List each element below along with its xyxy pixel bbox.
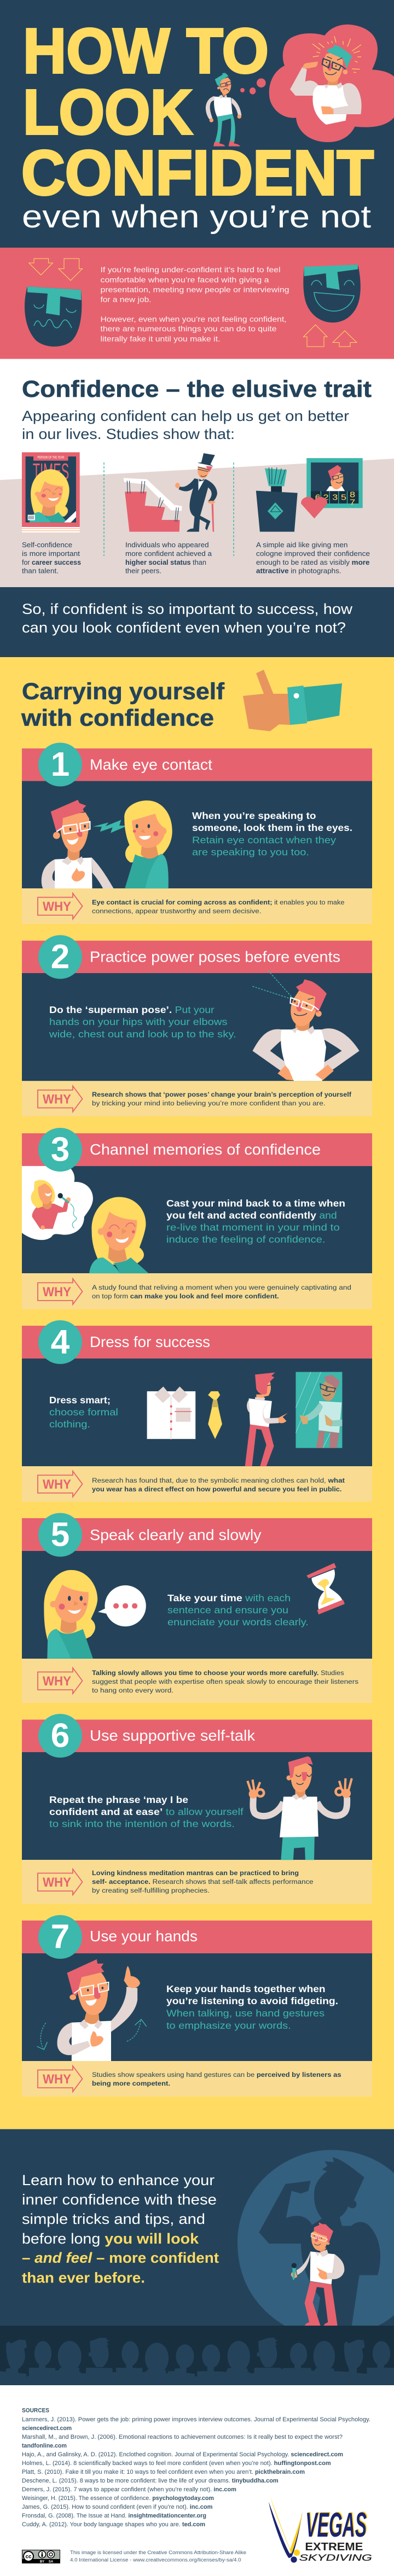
- step text: are speaking to you too.: [192, 846, 309, 857]
- why text: connections, appear trustworthy and seem decisive.: [92, 908, 262, 915]
- step text: [192, 810, 352, 857]
- panel: conclusion stage: [0, 2129, 394, 2326]
- why text: Talking slowly allows you time to choose your words more carefully. Studies: [92, 1669, 344, 1677]
- why arrow: WHY: [43, 1674, 71, 1689]
- icon: cologne, photo and heart: 7: [350, 497, 355, 507]
- step title: Dress for success: [90, 1333, 210, 1350]
- caption: career success: is more important: [22, 550, 80, 558]
- step title: Speak clearly and slowly: [90, 1526, 262, 1543]
- why text: [92, 1284, 351, 1300]
- sources: Weisinger, H. (2015). The essence of confidence. psychologytoday.com: [22, 2495, 214, 2502]
- caption: cologne: [256, 541, 370, 575]
- step text: hands on your hips with your elbows: [49, 1016, 228, 1027]
- step title: Practice power poses before events: [90, 948, 340, 965]
- why text: [92, 1477, 345, 1493]
- why arrow: WHY: [43, 1875, 71, 1890]
- heading: Confidence – the elusive trait: [22, 376, 372, 402]
- dividers: [104, 462, 234, 556]
- why arrow: WHY: [43, 1285, 71, 1299]
- intro text: there are numerous things you can do to quite: [101, 324, 277, 333]
- illustration: shirt, tie, man and mirror: [147, 1372, 342, 1466]
- intro text: If you’re feeling under-confident it’s hard to feel: [101, 265, 280, 274]
- why text: A study found that reliving a moment when you were genuinely captivating and: [92, 1284, 351, 1291]
- intro text: [101, 265, 289, 343]
- caption: career success: for career success: [22, 559, 81, 566]
- step text: Retain eye contact when they: [192, 834, 336, 845]
- logo: Vegas Extreme Skydiving: SKYDIVING: [299, 2552, 372, 2563]
- icon: thumbs up: [243, 670, 342, 731]
- why text: [92, 1669, 358, 1694]
- caption: cologne: A simple aid like giving men: [256, 541, 348, 549]
- caption: career success: [22, 541, 81, 575]
- step text: to sink into the intention of the words.: [49, 1818, 235, 1829]
- why text: to hang onto every word.: [92, 1687, 173, 1694]
- badge: number 5: 5: [51, 1516, 69, 1554]
- step text: Keep your hands together when: [166, 1983, 326, 1994]
- icon: magazine cover: TIMES: [33, 459, 69, 484]
- badge: number 4: [38, 1320, 82, 1364]
- closing text: [22, 2172, 219, 2286]
- panel: question band: can you look confident even when you’re not?: [22, 619, 346, 636]
- why text: Research shows that ‘power poses’ change your brain’s perception of yourself: [92, 1091, 352, 1098]
- illustration: man gesturing with hands: [37, 1959, 147, 2061]
- sources: Holmes, L. (2014). 8 scientifically backed ways to feel more confident (even when you’re not). huffingtonpost.com: [22, 2460, 331, 2467]
- why text: self- acceptance. Research shows that self-talk affects performance: [92, 1878, 314, 1886]
- panel: step 7: [22, 1915, 372, 2097]
- intro text: However, even when you’re not feeling confident,: [101, 314, 287, 323]
- icon: cologne, photo and heart: 2: [323, 493, 329, 502]
- illustration: woman remembering singing: [22, 1166, 149, 1273]
- badge: number 2: [38, 935, 82, 979]
- closing text: – and feel – more confident: [22, 2250, 219, 2266]
- worried small man: [206, 73, 266, 147]
- sources: tandfonline.com: [22, 2443, 67, 2449]
- intro text: comfortable when you’re faced with giving a: [101, 275, 269, 284]
- why arrow: [38, 1668, 82, 1694]
- step text: wide, chest out and look up to the sky.: [49, 1029, 236, 1040]
- badge: number 5: [38, 1513, 82, 1557]
- step text: Dress smart;: [49, 1395, 111, 1406]
- sources: James, G. (2015). How to sound confident (even if you’re not). inc.com: [22, 2504, 212, 2510]
- subheading: [22, 408, 349, 442]
- heading: carrying yourself: with confidence: [21, 705, 214, 731]
- step text: Repeat the phrase ‘may I be: [49, 1794, 188, 1805]
- sources: Demers, J. (2015). 7 ways to appear confident (when you’re really not). inc.com: [22, 2486, 236, 2493]
- sources: sciencedirect.com: [22, 2425, 72, 2432]
- why text: Research has found that, due to the symbolic meaning clothes can hold, what: [92, 1477, 345, 1484]
- closing text: simple tricks and tips, and: [22, 2211, 205, 2227]
- illustration: man and woman making eye contact: [42, 800, 172, 888]
- badge: number 7: 7: [51, 1918, 69, 1956]
- sources: Marshall, M., and Brown, J. (2006). Emotional reactions to achievement outcomes: Is it really best to expect the worst?: [22, 2434, 343, 2440]
- panel: step 3: [22, 1128, 372, 1309]
- spotlight and silhouette: [237, 2150, 394, 2326]
- panel: step 2: [22, 935, 372, 1116]
- step text: When you’re speaking to: [192, 810, 316, 821]
- step text: choose formal: [49, 1407, 118, 1418]
- step text: re-live that moment in your mind to: [166, 1222, 340, 1233]
- why arrow: WHY: [43, 1477, 71, 1492]
- panel: step 6: [22, 1714, 372, 1904]
- illustration: woman speaking and hourglass: [44, 1563, 345, 1659]
- why text: being more competent.: [92, 2080, 170, 2087]
- intro text: presentation, meeting new people or interviewing: [101, 285, 289, 294]
- panel: audience: [0, 2326, 394, 2385]
- step text: enunciate your words clearly.: [167, 1617, 309, 1627]
- illustration: meditating man: [247, 1757, 352, 1860]
- badge: number 6: 6: [51, 1717, 69, 1755]
- why text: [92, 2071, 341, 2087]
- step text: you’re listening to avoid fidgeting.: [166, 1995, 338, 2006]
- why text: Loving kindness meditation mantras can be practiced to bring: [92, 1869, 299, 1877]
- header panel: [0, 0, 394, 248]
- panel: intro: [0, 248, 394, 359]
- license text: This image is licensed under the Creative Commons Attribution-Share Alike: [70, 2550, 246, 2556]
- why text: suggest that people with expertise often speak slowly to encourage their listeners: [92, 1678, 358, 1685]
- caption: career success: than talent.: [22, 567, 59, 575]
- badge: number 1: [38, 742, 82, 786]
- icon: sad mask with down arrows: [25, 259, 82, 347]
- step text: [166, 1198, 345, 1245]
- sources: Fronsdal, G. (2008). The Issue at Hand. insightmeditationcenter.org: [22, 2513, 206, 2519]
- why arrow: WHY: [43, 1092, 71, 1106]
- icon: creative commons badge: [22, 2550, 60, 2564]
- icon: creative commons badge: cc: [25, 2554, 32, 2560]
- why arrow: [38, 1869, 82, 1895]
- icon: happy mask with up arrows: [303, 265, 361, 347]
- step text: [49, 1395, 118, 1430]
- panel: step 4: [22, 1320, 372, 1502]
- title: [21, 15, 374, 208]
- badge: number 7: [38, 1915, 82, 1959]
- title: HOW TO: [23, 15, 269, 86]
- closing text: than ever before.: [22, 2270, 145, 2286]
- badge: number 6: [38, 1714, 82, 1758]
- icon: cologne, photo and heart: [256, 458, 363, 532]
- subtitle: even when you’re not: [22, 199, 371, 235]
- why text: [92, 1091, 352, 1107]
- caption: social status: their peers.: [125, 567, 161, 575]
- sources: [22, 2408, 370, 2528]
- why arrow: [38, 2066, 82, 2092]
- panel: step 5: [22, 1513, 372, 1703]
- heading: carrying yourself: Carrying yourself: [22, 678, 225, 705]
- illustration: superman pose: [252, 970, 360, 1081]
- badge: number 2: 2: [51, 938, 69, 976]
- sources: Deschene, L. (2015). 8 ways to be more confident: live the life of your dreams. tinybuddha.com: [22, 2478, 279, 2484]
- why text: Eye contact is crucial for coming across as confident; it enables you to make: [92, 899, 345, 906]
- caption: social status: higher social status than: [125, 559, 206, 566]
- icon: stairs and man in top hat: [124, 453, 217, 532]
- icon: creative commons badge: SA: [49, 2561, 54, 2564]
- why text: Studies show speakers using hand gestures can be perceived by listeners as: [92, 2071, 341, 2079]
- closing text: before long you will look: [22, 2230, 199, 2247]
- closing text: Learn how to enhance your: [22, 2172, 215, 2188]
- step text: Cast your mind back to a time when: [166, 1198, 345, 1209]
- why arrow: [38, 1471, 82, 1497]
- step text: [167, 1593, 309, 1627]
- caption: social status: [125, 541, 212, 575]
- license text: 4.0 International License - www.creativecommons.org/licenses/by-sa/4.0: [70, 2557, 241, 2563]
- sources: Lammers, J. (2013). Power gets the job: priming power improves interview outcomes. Journal of Experimental Social Psychology.: [22, 2416, 370, 2423]
- icon: cologne, photo and heart: 8: [350, 490, 355, 499]
- badge: number 4: 4: [51, 1323, 70, 1361]
- sources: Cuddy, A. (2012). Your body language shapes who you are. ted.com: [22, 2521, 205, 2528]
- why arrow: WHY: [43, 899, 71, 914]
- why text: you wear has a direct effect on how powerful and secure you feel in public.: [92, 1485, 341, 1493]
- subheading: in our lives. Studies show that:: [22, 426, 235, 442]
- icon: magazine cover: PERSON OF THE YEAR: [38, 455, 65, 459]
- panel: question band: So, if confident is so important to success, how: [22, 601, 353, 617]
- panel: the elusive trait: [0, 376, 394, 587]
- why text: by creating self-fulfilling prophecies.: [92, 1887, 210, 1894]
- step title: Use your hands: [90, 1928, 198, 1945]
- subheading: Appearing confident can help us get on better: [22, 408, 349, 424]
- step text: When talking, use hand gestures: [166, 2008, 325, 2019]
- step title: Channel memories of confidence: [90, 1141, 321, 1158]
- step title: Make eye contact: [90, 756, 212, 773]
- step text: Take your time with each: [167, 1593, 291, 1603]
- caption: social status: Individuals who appeared: [125, 541, 209, 549]
- why text: by tricking your mind into believing you’re more confident than you are.: [92, 1099, 326, 1107]
- step text: you felt and acted confidently and: [166, 1210, 337, 1221]
- panel: step 1: [22, 742, 372, 924]
- intro text: for a new job.: [101, 295, 151, 303]
- heading: carrying yourself: [21, 678, 225, 731]
- sources: SOURCES: [22, 2408, 49, 2414]
- icon: cologne, photo and heart: 5: [341, 493, 346, 502]
- thought bubble with confident man: [269, 25, 394, 142]
- why text: on top form can make you look and feel more confident.: [92, 1292, 279, 1300]
- why text: [92, 1869, 314, 1894]
- step text: sentence and ensure you: [167, 1605, 288, 1615]
- caption: career success: Self-confidence: [22, 541, 72, 549]
- logo: Vegas Extreme Skydiving: [269, 2497, 372, 2563]
- step text: someone, look them in the eyes.: [192, 822, 352, 833]
- logo: Vegas Extreme Skydiving: EXTREME: [305, 2540, 363, 2553]
- panel: question band: [0, 587, 394, 657]
- step text: confident and at ease’ to allow yourself: [49, 1806, 244, 1817]
- step text: to emphasize your words.: [166, 2020, 291, 2031]
- why text: [92, 899, 345, 915]
- caption: cologne: cologne improved their confidence: [256, 550, 370, 558]
- icon: cologne, photo and heart: 3: [332, 493, 338, 502]
- step text: induce the feeling of confidence.: [166, 1234, 325, 1245]
- sources: Hajo, A., and Galinsky, A. D. (2012). Enclothed cognition. Journal of Experimental Social Psychology. sciencedirect.com: [22, 2451, 343, 2458]
- why arrow: [38, 1086, 82, 1112]
- badge: number 3: 3: [51, 1131, 69, 1169]
- step text: [49, 1004, 236, 1040]
- sources: Platt, S. (2010). Fake it till you make it: 10 ways to feel confident even when you aren’t. pickthebrain.com: [22, 2469, 305, 2475]
- man on stage with microphone: [291, 2222, 344, 2326]
- intro text: literally fake it until you make it.: [101, 335, 220, 343]
- badge: number 1: 1: [51, 746, 69, 783]
- step text: [49, 1794, 244, 1829]
- panel: carrying yourself background: [0, 657, 394, 2129]
- badge: number 3: [38, 1128, 82, 1172]
- title: LOOK: [23, 77, 193, 148]
- why arrow: [38, 1279, 82, 1304]
- license text: [70, 2550, 246, 2563]
- icon: creative commons badge: BY: [40, 2561, 44, 2564]
- caption: cologne: enough to be rated as visibly more: [256, 559, 370, 566]
- why arrow: WHY: [43, 2072, 71, 2087]
- caption: cologne: attractive in photographs.: [256, 567, 341, 575]
- step text: [166, 1983, 338, 2031]
- step title: Use supportive self-talk: [90, 1727, 256, 1744]
- icon: cologne, photo and heart: 6: [315, 493, 321, 502]
- step text: clothing.: [49, 1419, 90, 1430]
- step text: Do the ‘superman pose’. Put your: [49, 1004, 215, 1015]
- icon: magazine cover: [22, 452, 80, 532]
- title: CONFIDENT: [21, 137, 374, 208]
- closing text: inner confidence with these: [22, 2192, 217, 2208]
- caption: social status: more confident achieved a: [125, 550, 212, 558]
- why arrow: [38, 893, 82, 919]
